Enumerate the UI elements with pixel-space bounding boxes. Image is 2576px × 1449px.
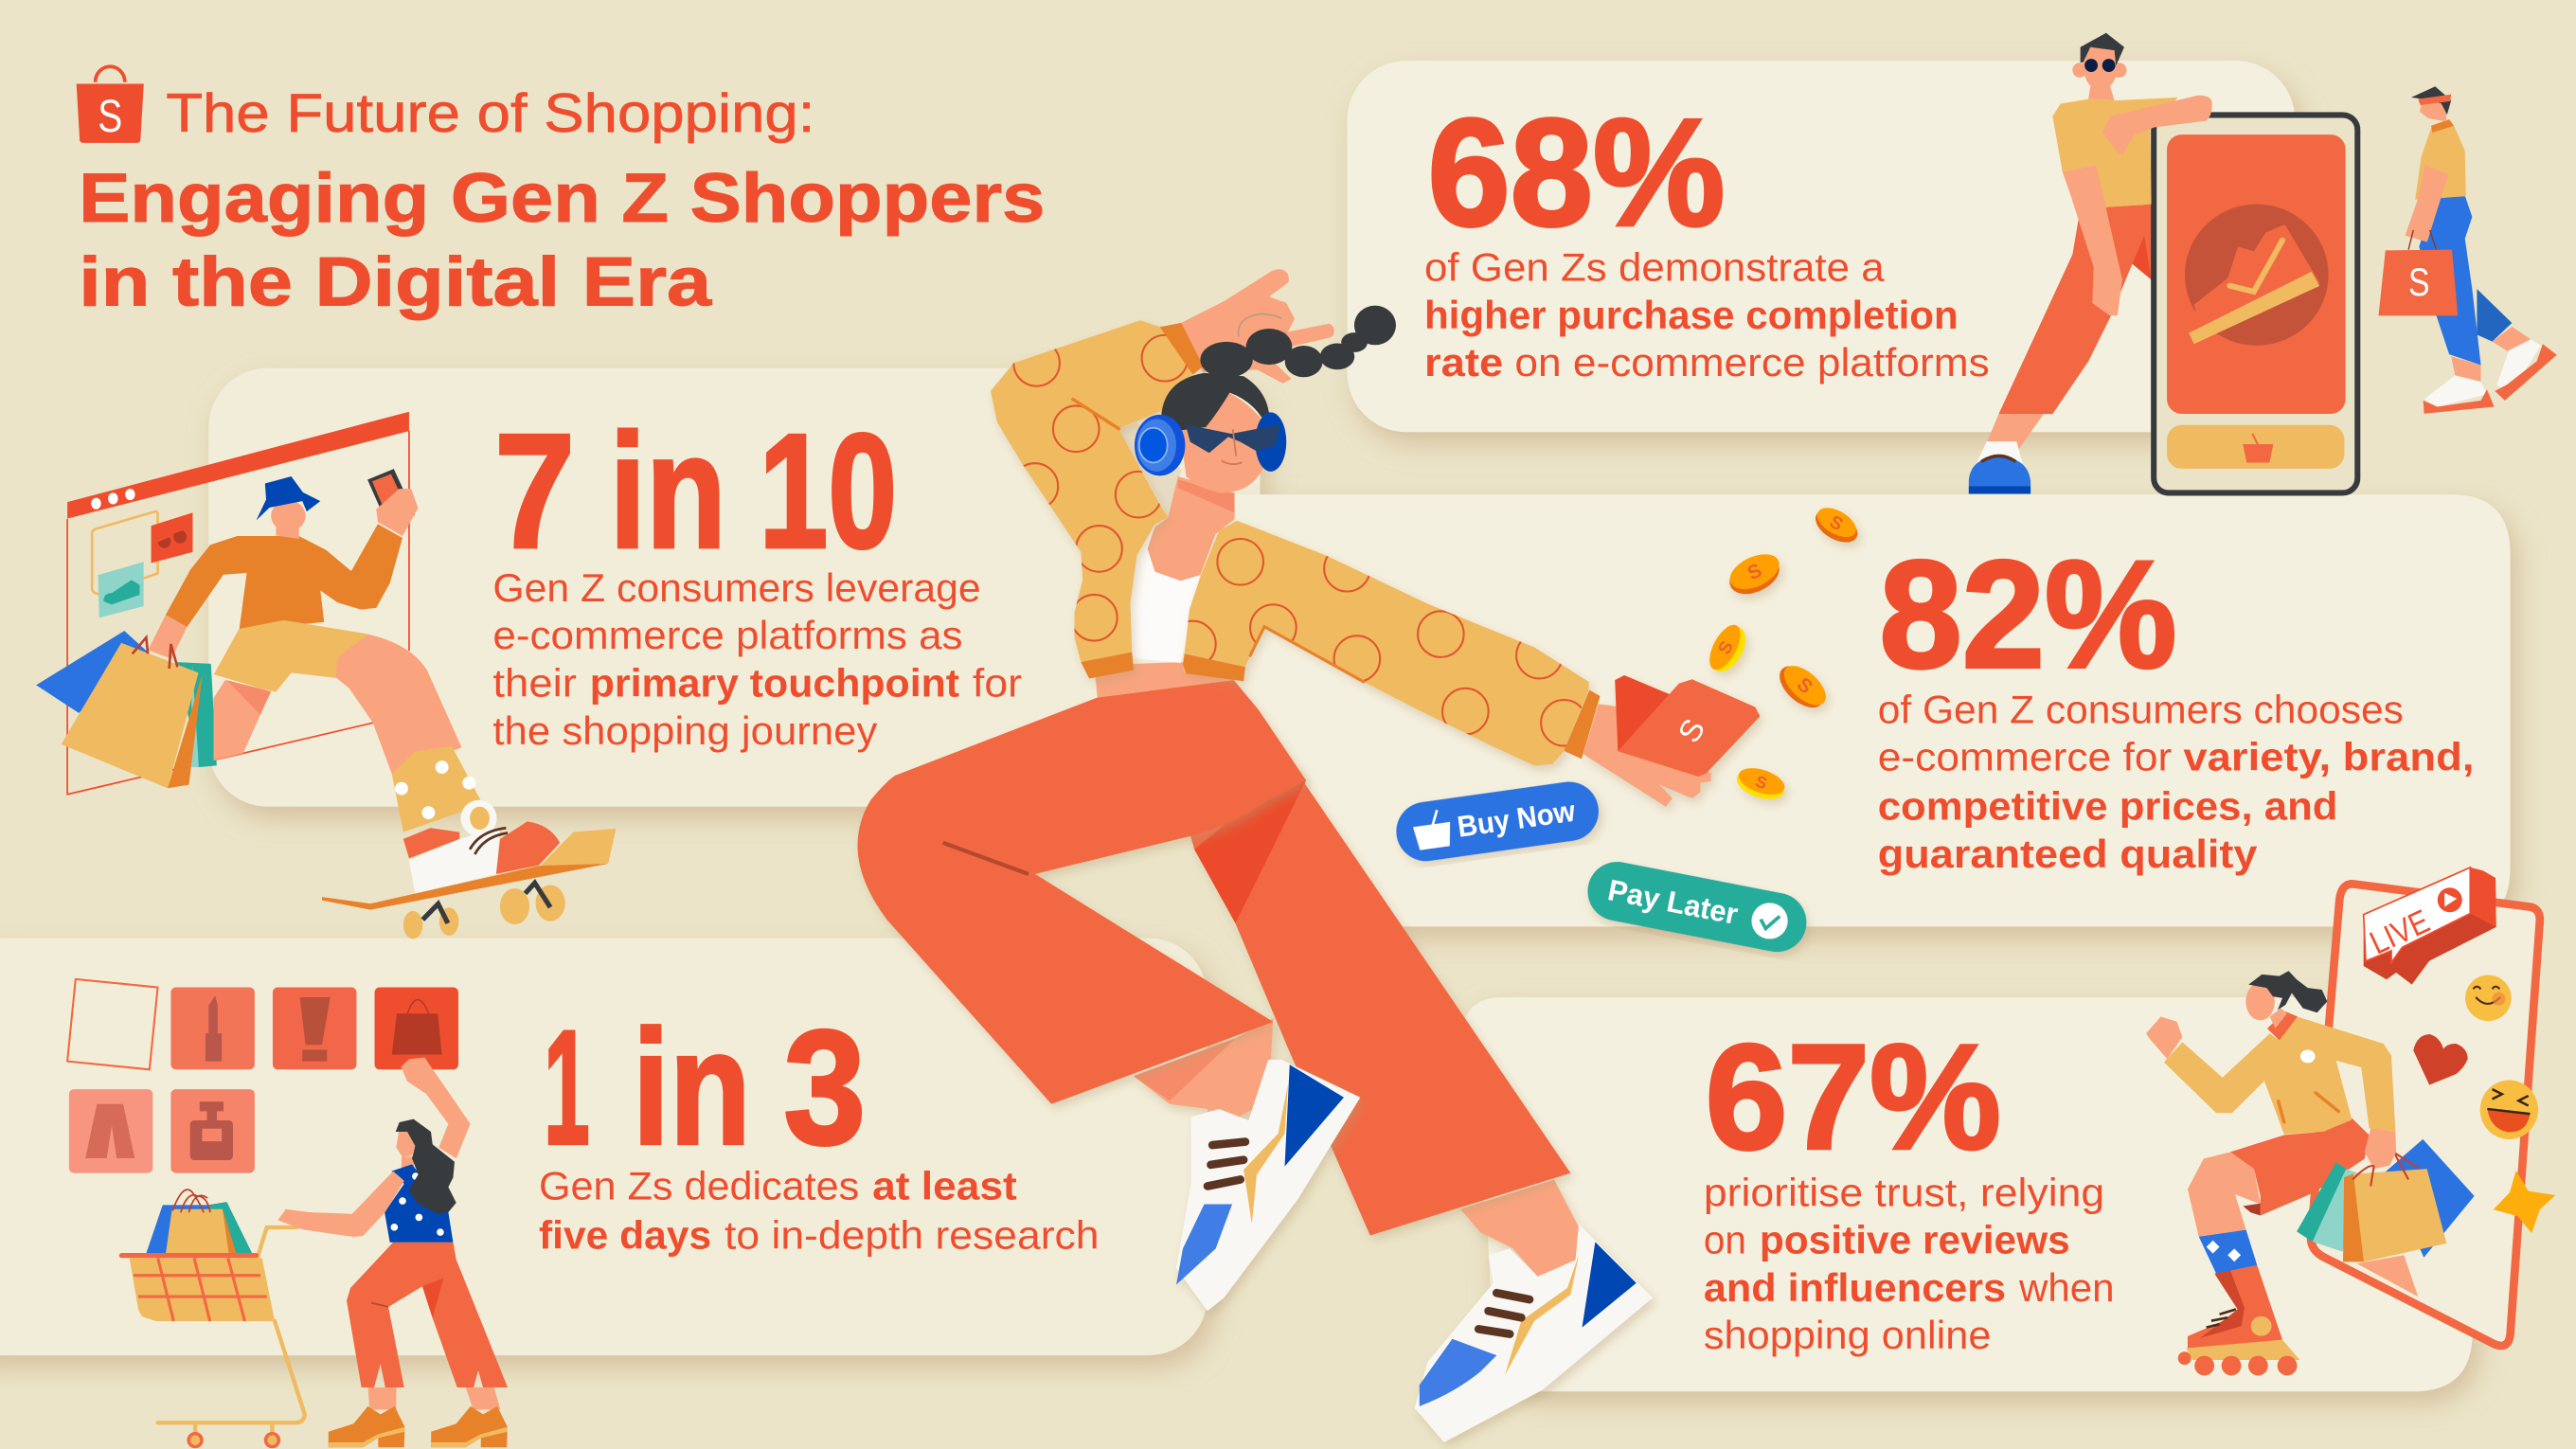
skateboard [322, 829, 617, 939]
text block: 1 in 3: 1 [544, 997, 590, 1178]
text block: 82 percent: guaranteed quality [1878, 832, 2257, 876]
emoji smile [2465, 975, 2512, 1021]
right shoe [1415, 1180, 1653, 1442]
coins: S [1826, 512, 1846, 535]
text block: 82 percent [1878, 529, 2474, 876]
text block: 7 in 10: in [610, 402, 726, 582]
text block: 82 percent: competitive prices, and [1878, 784, 2337, 829]
text block: 82 percent: variety, brand, [2183, 735, 2474, 779]
man upper body [2052, 33, 2212, 315]
text block: 1 in 3 [539, 997, 1100, 1257]
torso [1094, 423, 1241, 698]
coins: S [1753, 772, 1769, 793]
shopper [277, 1058, 508, 1447]
text block: 67 percent: shopping online [1704, 1313, 1991, 1357]
text block: 1 in 3: Gen Zs dedicates [539, 1163, 859, 1208]
orange shopping bag: S [2408, 259, 2430, 304]
live badge [2364, 868, 2496, 985]
left leg [858, 680, 1306, 1104]
panel: 67 percent [1461, 997, 2473, 1391]
hand and wallet [1583, 675, 1760, 807]
text block: 1 in 3: in [633, 997, 751, 1178]
text block: 67 percent: 67% [1706, 1014, 2001, 1181]
product tiles [67, 979, 458, 1173]
hand and wallet: S [1671, 713, 1711, 748]
hair braid [1200, 306, 1396, 378]
text block: 67 percent: prioritise trust, relying [1704, 1170, 2104, 1214]
text block: 82 percent: of Gen Z consumers chooses [1878, 687, 2404, 731]
hand raised [1181, 269, 1334, 384]
orange shopping bag [2378, 230, 2458, 315]
illustration: product tiles and shopper with cart [67, 979, 508, 1447]
icon: shopping bag logo: S [98, 91, 122, 142]
left shoe [1134, 1019, 1360, 1311]
text block: 1 in 3: five days [539, 1212, 711, 1257]
text block: 68 percent: on e-commerce platforms [1514, 340, 1990, 385]
panel: 82 percent [1235, 494, 2511, 926]
button: buy now: Buy Now [1456, 794, 1578, 844]
text block: 1 in 3: 3 [783, 997, 866, 1178]
text block: 7 in 10: Gen Z consumers leverage [492, 565, 981, 610]
live badge: LIVE [2365, 903, 2435, 962]
illustration: walking shopper [2378, 86, 2557, 414]
coins: S [1714, 638, 1738, 658]
icon: basket [1413, 809, 1452, 850]
text block: 1 in 3: at least [872, 1163, 1017, 1208]
button: pay later: Pay Later [1605, 873, 1741, 931]
text block: 1 in 3: to in-depth research [724, 1212, 1100, 1257]
head [1135, 373, 1286, 492]
phone frame [2311, 884, 2540, 1346]
text block: 67 percent: on [1704, 1218, 1746, 1262]
panel: 68 percent [1347, 61, 2295, 432]
text block: 7 in 10: 7 [494, 402, 575, 582]
text block: 67 percent: and influencers [1704, 1265, 2006, 1310]
illustration: main figure running [858, 269, 1760, 1442]
title block [77, 66, 1045, 321]
bags [36, 631, 217, 767]
text block: 7 in 10: their [492, 661, 577, 706]
button: buy now [1392, 778, 1602, 865]
text block: 67 percent: when [2018, 1265, 2115, 1310]
button: pay later [1583, 857, 1812, 957]
coins [1703, 502, 1864, 805]
panel: 1 in 3 [0, 939, 1208, 1355]
coins: S [1793, 673, 1817, 698]
text block: 82 percent: 82% [1879, 529, 2176, 700]
front shopping bag [62, 637, 203, 788]
person [148, 469, 560, 894]
phone [2154, 115, 2357, 492]
text block: 68 percent: 68% [1427, 88, 1725, 259]
illustration: man leaning on phone [1969, 33, 2357, 493]
text block: 7 in 10: primary touchpoint [590, 661, 959, 706]
text block: 68 percent: of Gen Zs demonstrate a [1424, 245, 1886, 290]
text block: 82 percent: e-commerce for [1878, 735, 2172, 779]
heading: the future of shopping: The Future of Shopping: [166, 83, 814, 144]
illustration: skateboarder in browser window [36, 412, 617, 939]
icon: check [1748, 900, 1791, 942]
man lower body [1969, 205, 2152, 493]
runner [2146, 971, 2475, 1375]
jacket [991, 320, 1601, 765]
text block: 68 percent: higher purchase completion [1424, 293, 1959, 337]
heading: in the digital era: in the Digital Era [79, 244, 712, 321]
text block: 7 in 10: the shopping journey [492, 708, 878, 753]
right leg [1150, 680, 1570, 1235]
cart [121, 1190, 305, 1447]
browser window [67, 412, 409, 795]
text block: 7 in 10: e-commerce platforms as [492, 613, 963, 657]
emoji laugh [2480, 1081, 2538, 1139]
panel: 7 in 10 [208, 368, 1261, 807]
coins: S [1744, 560, 1765, 584]
text block: 67 percent [1704, 1014, 2115, 1357]
illustration: live stream phone and runner [2146, 868, 2555, 1375]
star [2494, 1171, 2555, 1233]
text block: 67 percent: positive reviews [1760, 1218, 2070, 1262]
text block: 7 in 10: 10 [759, 402, 897, 582]
text block: 7 in 10 [492, 402, 1022, 753]
text block: 68 percent [1424, 88, 1990, 385]
text block: 68 percent: rate [1424, 340, 1503, 385]
heading: engaging gen z shoppers: Engaging Gen Z Shoppers [79, 160, 1045, 237]
text block: 7 in 10: for [973, 661, 1022, 706]
icon: shopping bag logo [77, 66, 144, 143]
heart [2413, 1034, 2468, 1085]
